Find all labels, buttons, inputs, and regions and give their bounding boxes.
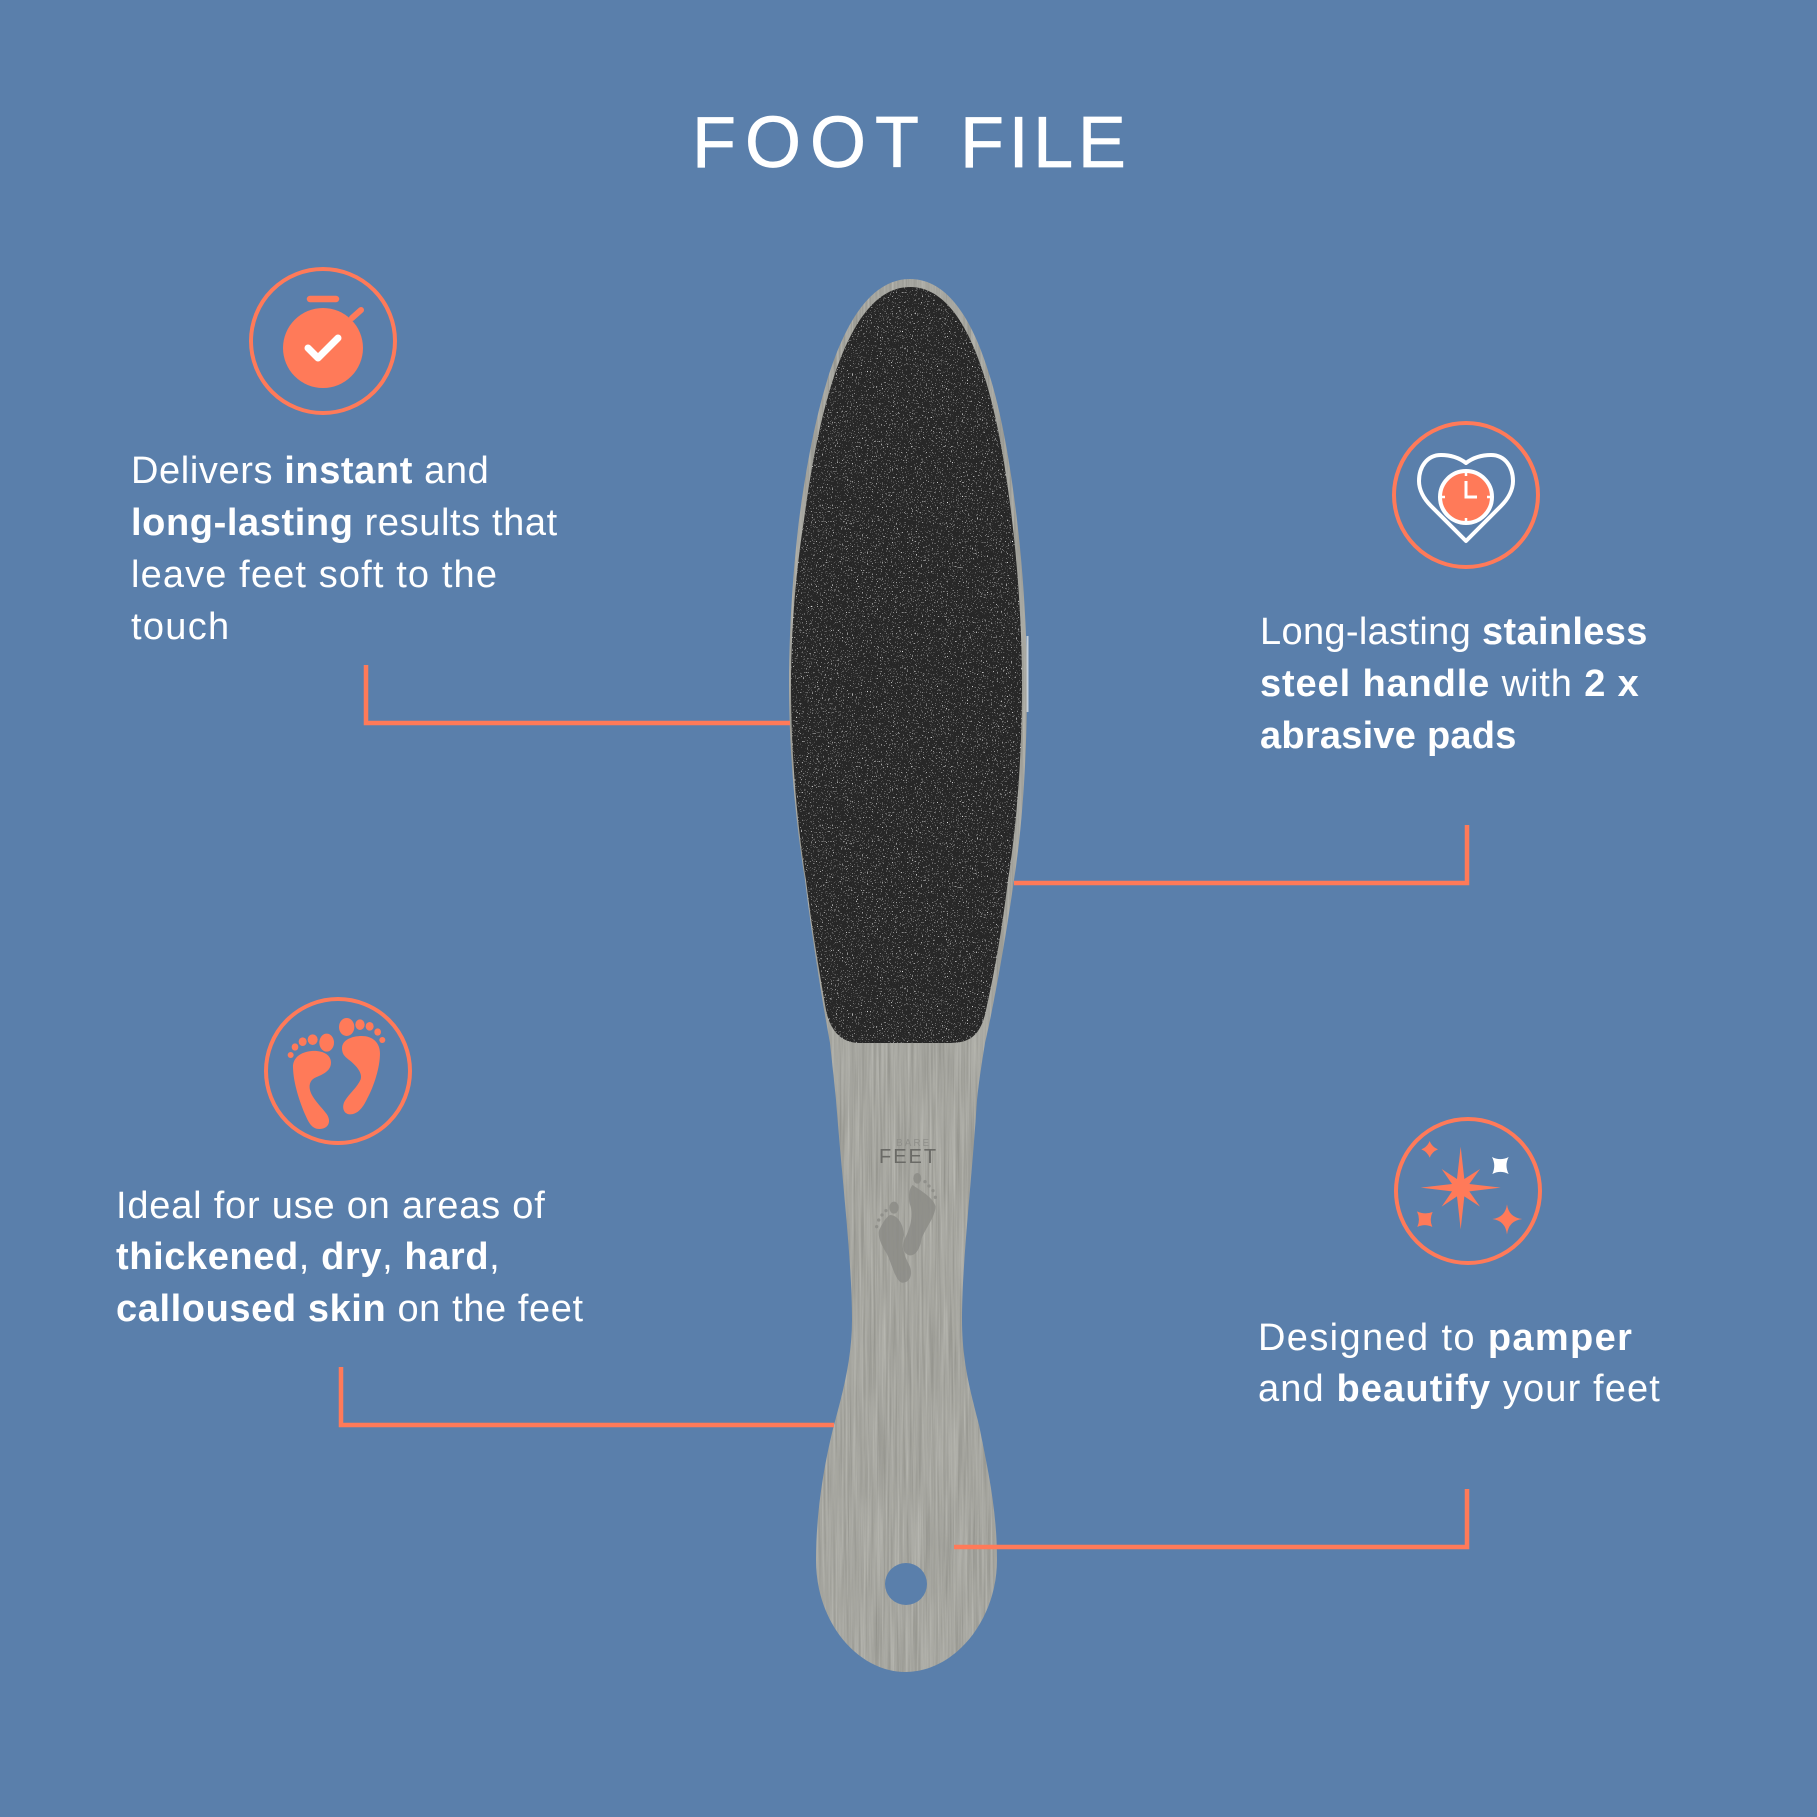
text: stainless steel handle: abrasive pads: [1260, 715, 1517, 757]
text: instant results: touch: [131, 606, 230, 648]
engraved text: FEET: FEET: [879, 1146, 938, 1168]
text: instant results: leave feet soft to the: [131, 554, 498, 596]
text: stainless steel handle: Long-lasting stainless: [1260, 611, 1648, 653]
text: pamper and beautify: Designed to pamper: [1258, 1317, 1633, 1359]
icon: bare feet: [266, 999, 410, 1143]
connector: instant results: [366, 665, 790, 723]
connector: stainless steel handle: [1014, 825, 1467, 883]
abrasive pad: [791, 287, 1022, 1043]
text: instant results: Delivers instant and: [131, 450, 489, 492]
connector: thickened skin: [341, 1367, 834, 1425]
edge highlight: [1026, 636, 1028, 712]
text: thickened skin: thickened, dry, hard,: [116, 1236, 500, 1278]
text: thickened skin: [116, 1185, 584, 1330]
metal handle: [789, 279, 1027, 1672]
text: thickened skin: calloused skin on the feet: [116, 1288, 584, 1330]
text: instant results: [131, 450, 558, 648]
engraved logo: [875, 1138, 938, 1283]
connector: pamper and beautify: [954, 1489, 1467, 1547]
engraved text: BARE: BARE: [896, 1138, 931, 1149]
engraved feet: [875, 1173, 937, 1283]
text: pamper and beautify: and beautify your feet: [1258, 1368, 1661, 1410]
title: FOOT: [692, 103, 928, 183]
title: FILE: [960, 103, 1130, 183]
hanging hole: [885, 1563, 927, 1605]
foot file product: [789, 279, 1028, 1672]
text: stainless steel handle: steel handle with 2 x: [1260, 663, 1640, 705]
icon: stopwatch with check: [251, 269, 395, 413]
text: stainless steel handle: [1260, 611, 1648, 757]
text: thickened skin: Ideal for use on areas of: [116, 1185, 546, 1227]
text: instant results: long-lasting results that: [131, 502, 558, 544]
icon: sparkles: [1396, 1119, 1540, 1263]
text: pamper and beautify: [1258, 1317, 1661, 1410]
icon: heart with clock: [1394, 423, 1538, 567]
